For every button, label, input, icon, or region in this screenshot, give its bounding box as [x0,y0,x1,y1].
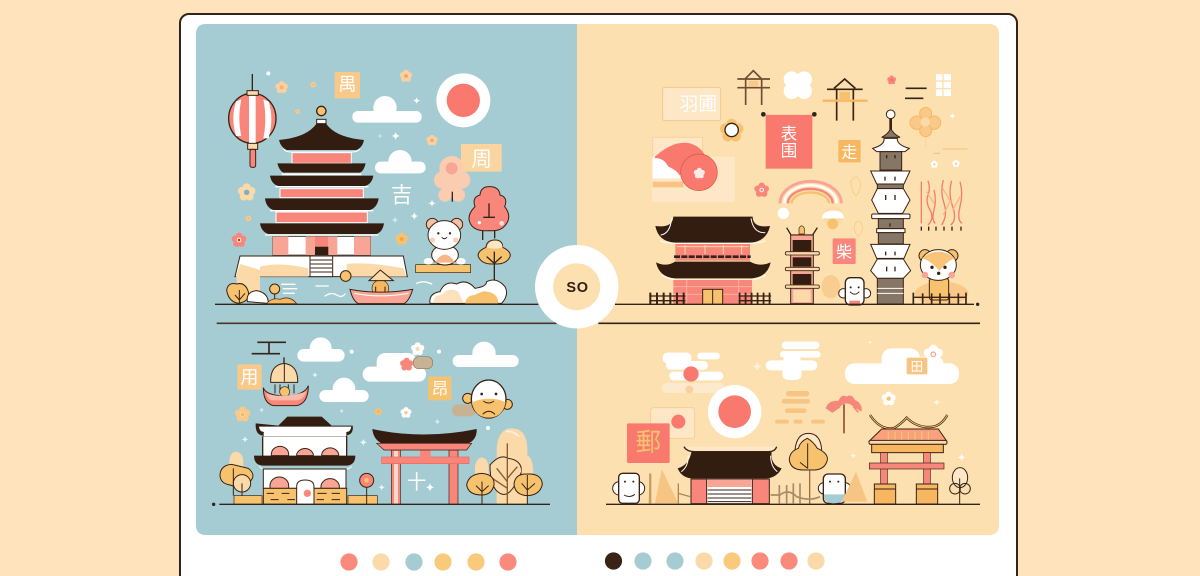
palette dots left [340,553,517,571]
ground line [606,502,980,506]
card frame [180,14,1017,576]
stacked cloud center [766,342,821,380]
panel: right peach [577,24,999,535]
pagoda base and stairs [235,256,407,300]
hanging banner: 围 [781,142,797,161]
ground dot [976,303,979,306]
centre badge [535,245,618,328]
red round flower [360,473,374,504]
cloud [375,150,426,173]
water ripples [282,282,432,296]
panel: left blue [196,24,577,535]
cloud [352,96,422,123]
long cloud with tile: 田 [911,360,923,374]
hanging banner [761,112,817,169]
flower cluster with cloud [400,342,433,370]
gold character tile: 禺 [338,75,356,95]
coral willow curtain [921,180,962,231]
torii icon 1 [737,71,770,105]
gold round tree [789,433,827,504]
pale character tile: 周 [471,148,492,171]
torii gate: 十 [407,471,426,493]
small flowers and squares [232,70,437,247]
white mascot left [613,473,645,503]
coral flower and lines [887,76,927,98]
small outline tree [950,468,970,504]
ground line [615,302,974,306]
illustration: bottom-left scene [212,337,550,506]
illustration: top-right scene [598,71,980,323]
torii gate [372,429,477,504]
palette dots right [605,552,825,570]
gold flower with circle [720,119,743,142]
ground dot [212,503,215,506]
illustration: bottom-right scene [606,340,980,504]
flowers and sparkles [235,350,490,491]
white clover flower [784,71,812,99]
smiling character [839,278,871,305]
icon: sun [708,385,761,438]
tall pagoda [871,110,911,304]
white grid icon [936,74,951,96]
torii icon 2 [823,79,868,121]
tile with coral dot [651,408,695,438]
left garden plants [227,283,297,304]
tiger bear mascot [915,250,968,305]
character tiles: 昂 [432,379,448,398]
illustration: top-left scene [215,70,557,323]
pale line drawings [851,177,863,237]
orange cone tree [842,472,867,502]
ticket with fan and coral circle [653,137,734,201]
gold character tile: 走 [841,143,857,161]
coral flower [754,183,769,197]
character tiles [237,364,451,400]
round-face mascot [452,380,512,418]
white mascot right [818,474,851,503]
sparkles [753,340,966,461]
hanging banner: 表 [781,124,798,143]
icon: sun [436,73,490,127]
bear mascot on seat [416,218,471,273]
fence left [649,293,685,305]
coral character tile: 柴 [836,243,852,261]
gold tree [478,240,510,282]
ground line [215,302,538,306]
bushes right [430,280,507,303]
glyph strokes [252,342,286,354]
white two-storey hall [234,417,377,504]
character tiles: 用 [240,367,258,387]
wooden fence [771,483,820,503]
coral tree [469,187,509,240]
divider line [217,321,557,326]
pale blossom tree [434,156,470,202]
honeycomb flower [910,107,941,147]
shrine gate [869,415,947,504]
ticket outline with glyphs: 羽圃 [680,94,717,115]
centre badge: SO [566,280,589,296]
pale character tile [461,144,502,172]
peach rule and small white flowers [931,113,967,168]
fence right [739,293,771,305]
long cloud with tile [845,345,959,384]
left trees [220,452,253,496]
gold glyph strokes [775,391,825,424]
ticket outline with glyphs [663,87,721,121]
character glyph: 吉 [391,184,412,208]
rainbow [780,181,841,203]
coral character tile [833,238,856,264]
black-roof gate hall [678,447,782,504]
divider line [598,321,980,326]
gold blob [821,275,840,298]
double-roof hall [655,217,771,304]
icon: lantern [229,74,276,167]
white flower [882,392,896,405]
gold character tile [335,72,360,98]
sailing ship [263,357,308,406]
coral character tile: 郵 [636,429,661,457]
right trees [467,428,542,504]
small red tower [785,226,819,304]
small clouds under rainbow [778,207,844,229]
clouds [297,337,519,402]
pagoda [260,106,384,255]
ground line [219,502,550,506]
autumn tree triangle [648,469,690,503]
gold character tile [838,140,861,162]
coral palm icon [826,396,862,433]
fence under mascot [913,293,966,304]
coral character tile [627,423,670,463]
stacked cloud with coral sun [662,353,725,394]
boat with figure [350,270,413,304]
